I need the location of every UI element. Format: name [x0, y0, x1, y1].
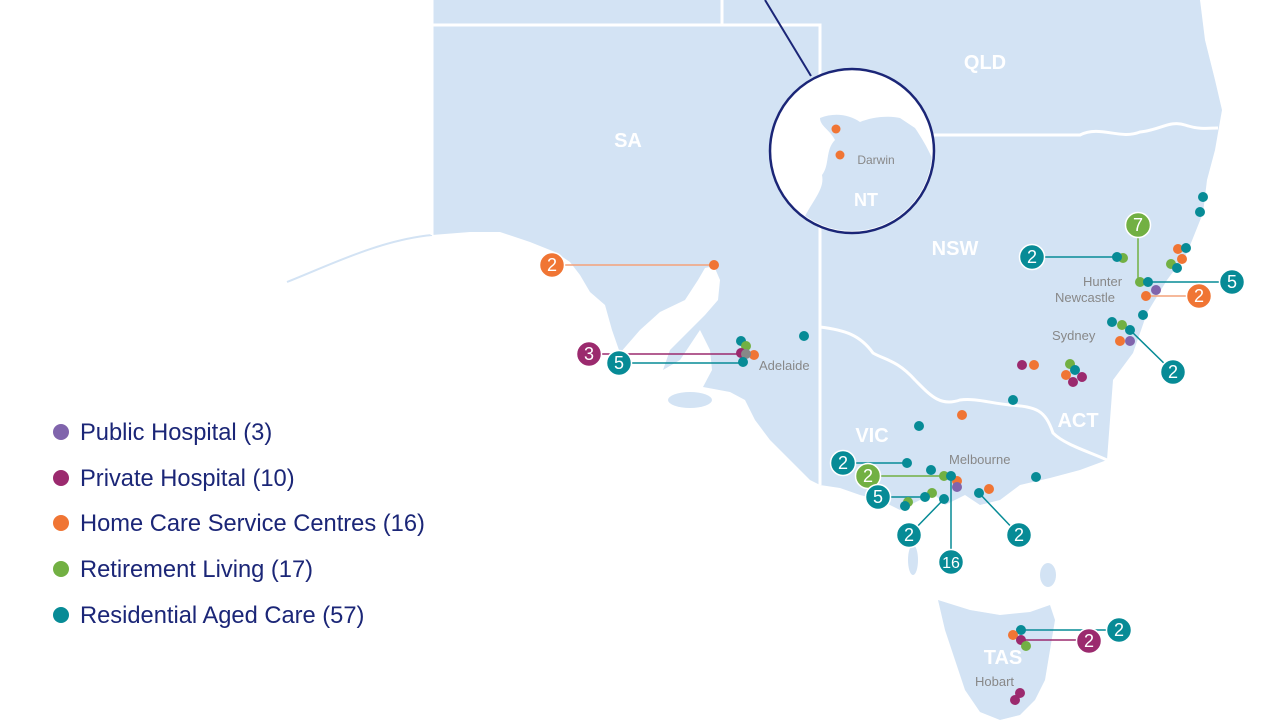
map: Tasmania: [938, 600, 1055, 720]
leader lines: [552, 225, 1232, 640]
state labels: NSW: [932, 238, 978, 260]
city labels: Hobart: [975, 674, 1014, 689]
map: mainland: [287, 0, 1222, 587]
text: 7: [1133, 215, 1143, 235]
text: 5: [1227, 272, 1237, 292]
state labels: SA: [614, 130, 642, 152]
text: 2: [1014, 525, 1024, 545]
state labels: QLD: [964, 52, 1006, 74]
text: 2: [1084, 631, 1094, 651]
text: 2: [1168, 362, 1178, 382]
state borders: [432, 0, 1218, 485]
legend: Residential Aged Care (57): [80, 603, 364, 629]
text: 2: [1027, 247, 1037, 267]
city labels: Melbourne: [949, 452, 1010, 467]
inset: NT Darwin: NT: [854, 190, 878, 210]
text: 5: [873, 487, 883, 507]
text: 2: [838, 453, 848, 473]
state labels: [614, 52, 1099, 669]
text: 16: [942, 555, 960, 572]
text: 3: [584, 344, 594, 364]
text: 2: [547, 255, 557, 275]
legend: Home Care Service Centres (16): [80, 511, 425, 537]
inset: NT Darwin: [765, 0, 941, 242]
city labels: Sydney: [1052, 328, 1096, 343]
text: 2: [1114, 620, 1124, 640]
legend: Private Hospital (10): [80, 466, 295, 492]
text: 2: [863, 466, 873, 486]
text: 5: [614, 353, 624, 373]
text: 2: [1194, 286, 1204, 306]
legend: Public Hospital (3): [80, 420, 272, 446]
text: 2: [904, 525, 914, 545]
city labels: Newcastle: [1055, 290, 1115, 305]
legend: Retirement Living (17): [80, 557, 313, 583]
state labels: ACT: [1057, 410, 1099, 432]
city labels: [759, 274, 1123, 689]
inset: NT Darwin: Darwin: [857, 153, 895, 167]
state labels: VIC: [855, 425, 889, 447]
legend: [53, 420, 425, 629]
city labels: Adelaide: [759, 358, 810, 373]
state labels: TAS: [984, 647, 1022, 669]
location dots: [709, 192, 1208, 705]
count badges: [540, 212, 1244, 654]
city labels: Hunter: [1083, 274, 1123, 289]
